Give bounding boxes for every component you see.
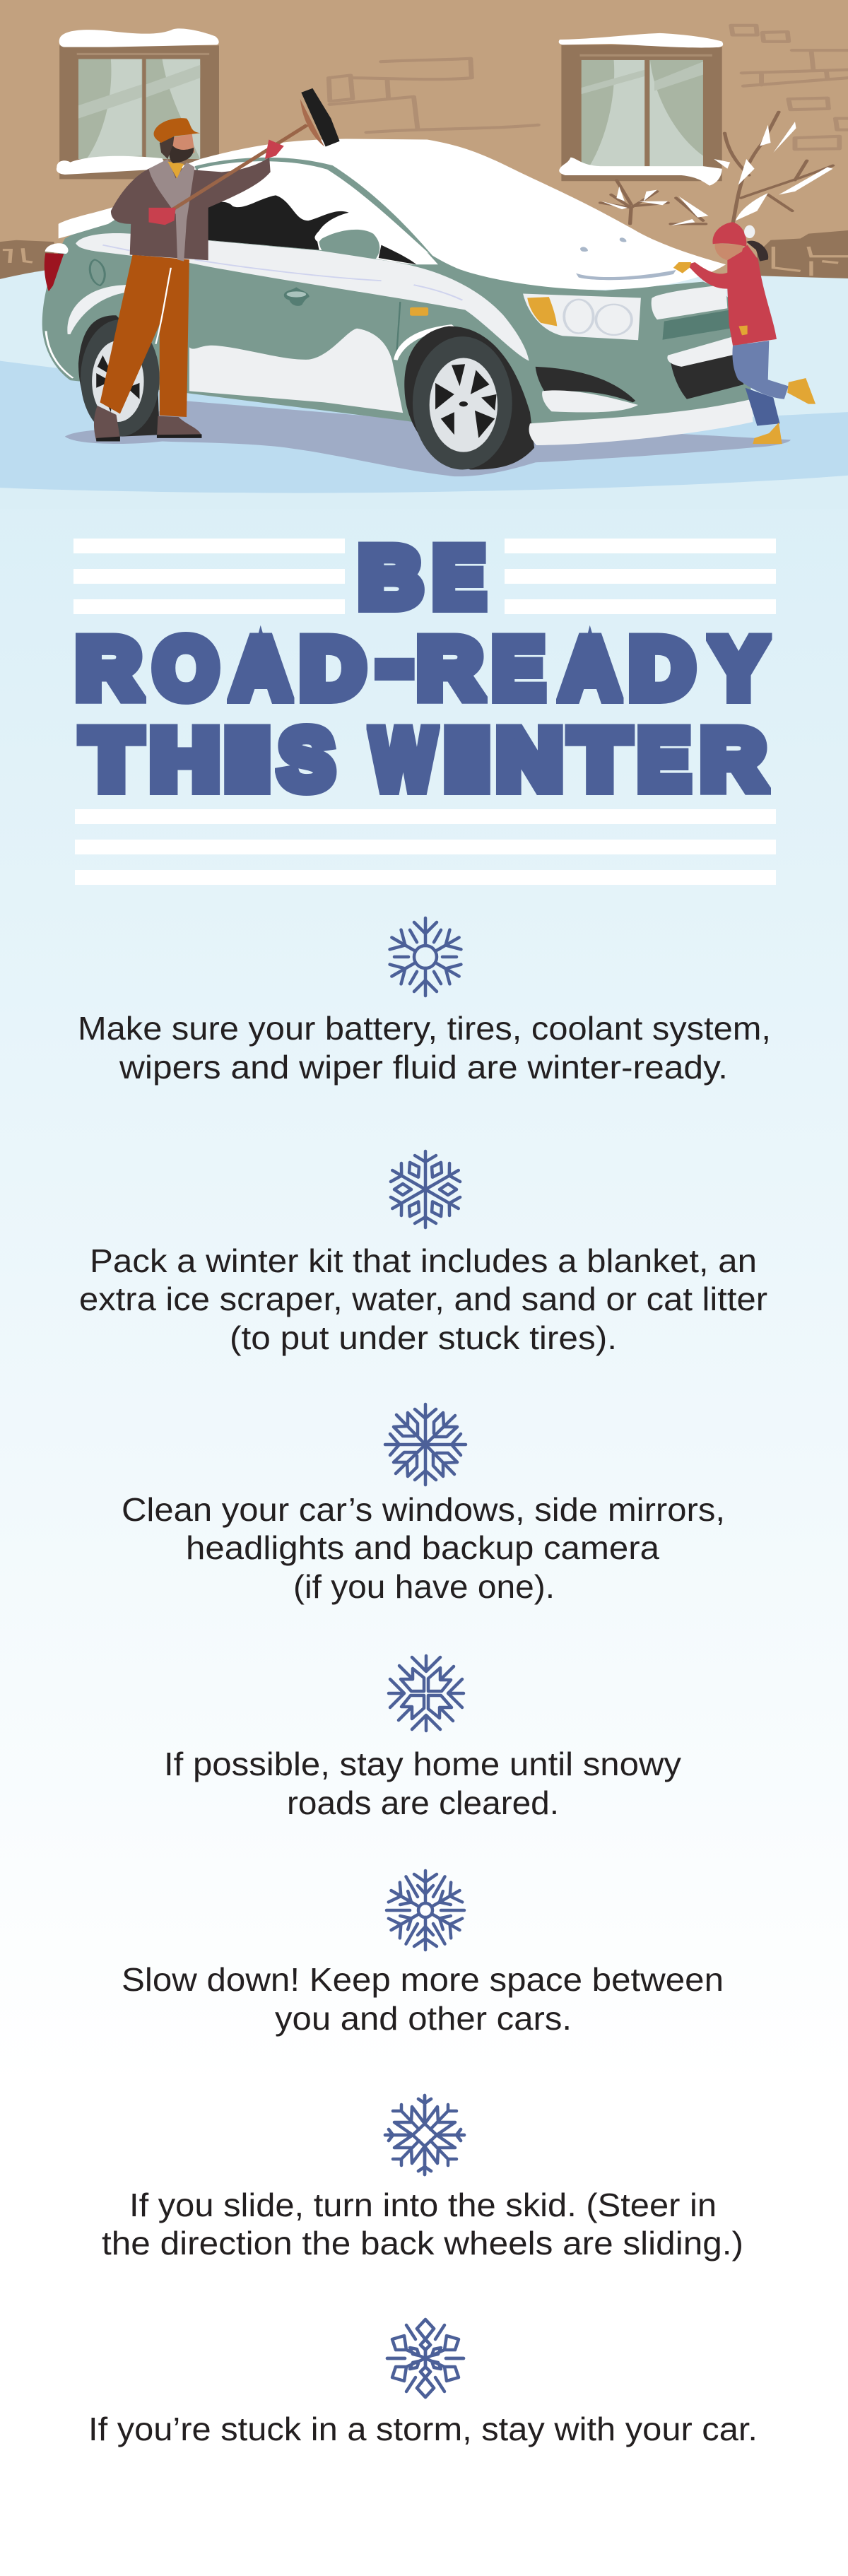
title	[76, 530, 772, 807]
taillight	[45, 253, 64, 291]
lower right grille	[671, 354, 743, 399]
title line: ROAD-READY: R	[418, 621, 482, 716]
dark side window	[207, 195, 349, 250]
left sill snow	[57, 156, 167, 175]
tip 2 text	[79, 1242, 767, 1356]
child's dark trouser leg	[746, 388, 780, 425]
tip 5 text: Slow down! Keep more space between	[122, 1961, 724, 1998]
tip 7 text: If you’re stuck in a storm, stay with your car.	[88, 2411, 758, 2447]
title line: ROAD-READY: D	[300, 621, 365, 716]
child	[673, 222, 815, 444]
mirror snow	[314, 214, 351, 242]
icon: snowflake 3	[385, 1404, 466, 1485]
child's standing boot	[753, 423, 782, 444]
grille snow lower	[667, 336, 736, 367]
car shadow	[65, 401, 791, 476]
tip 3 text	[122, 1491, 725, 1605]
man's hair	[160, 136, 174, 159]
brick wall background	[0, 0, 848, 286]
tip 7	[88, 2319, 758, 2447]
title line: THIS WINTER: N	[497, 712, 562, 807]
upper grille	[663, 310, 730, 340]
lower title stripe 2	[75, 840, 776, 854]
tip 4	[164, 1656, 681, 1821]
title line: THIS WINTER: T	[83, 712, 141, 807]
indicator light	[410, 307, 428, 316]
title line: THIS WINTER: E	[638, 712, 690, 807]
title line: BE: B	[359, 530, 422, 625]
tip 6 text: If you slide, turn into the skid. (Steer in	[129, 2187, 717, 2223]
title line: ROAD-READY: A	[232, 621, 290, 716]
icon: snowflake 5	[386, 1871, 465, 1950]
intake snow	[542, 390, 638, 412]
tip 1 text: Make sure your battery, tires, coolant system,	[78, 1010, 771, 1047]
tip 6 text: the direction the back wheels are sliding.)	[102, 2225, 743, 2262]
fog lamp intake	[536, 367, 635, 402]
title stripes: left lower	[73, 599, 345, 614]
tip 4 text: roads are cleared.	[287, 1784, 559, 1821]
icon: snowflake 4	[389, 1656, 464, 1731]
title line: ROAD-READY: R	[76, 621, 141, 716]
handle snow	[287, 291, 306, 298]
door seam	[396, 302, 400, 357]
title line: THIS WINTER: T	[571, 712, 629, 807]
title line: THIS WINTER	[76, 712, 771, 807]
title line: THIS WINTER: H	[151, 712, 219, 807]
bare trees with snow	[600, 112, 833, 225]
front bumper snow	[529, 399, 753, 445]
left window	[59, 45, 219, 179]
icon: snowflake 6	[385, 2095, 464, 2175]
title line: BE: E	[433, 530, 485, 625]
title line: ROAD-READY: D	[630, 621, 694, 716]
tip 1	[78, 918, 771, 1086]
child's face	[715, 243, 743, 260]
title line: THIS WINTER: W	[372, 712, 435, 807]
title line: THIS WINTER: I	[445, 712, 489, 807]
left window snow	[59, 28, 219, 47]
tip 5	[122, 1871, 724, 2037]
child's coat	[687, 245, 777, 346]
child's raised boot	[787, 378, 815, 404]
tip 4 text	[164, 1746, 681, 1821]
boot soles	[96, 434, 201, 441]
title line: THIS WINTER: I	[225, 712, 269, 807]
side window frame	[197, 157, 438, 264]
upper door snow band	[76, 233, 529, 361]
icon: snowflake 1	[386, 918, 465, 996]
right stone wall	[757, 230, 848, 278]
side mirror	[319, 230, 379, 259]
title line: ROAD-READY: Y	[711, 621, 766, 716]
lower title stripe 1	[75, 809, 776, 824]
title line: BE	[358, 530, 488, 625]
roof trim	[195, 158, 436, 259]
taillight snow	[45, 243, 69, 254]
hood wiper	[576, 270, 676, 280]
title line: ROAD-READY	[76, 615, 772, 716]
right window	[561, 45, 722, 181]
tip 2 text: extra ice scraper, water, and sand or cat litter	[79, 1281, 767, 1317]
title line: ROAD-READY: A	[561, 621, 619, 716]
front wheel	[404, 326, 534, 469]
broom	[170, 88, 340, 211]
man's yellow shirt	[167, 162, 184, 179]
windshield corner	[379, 245, 416, 264]
leg highlight	[155, 268, 171, 344]
lower title stripe 3	[75, 870, 776, 885]
tip 3 text: Clean your car’s windows, side mirrors,	[122, 1491, 725, 1528]
tip 3 text: (if you have one).	[293, 1568, 555, 1605]
grille snow upper	[652, 285, 727, 319]
tip 1 text: wipers and wiper fluid are winter-ready.	[119, 1049, 728, 1086]
tip 2 text: (to put under stuck tires).	[230, 1319, 617, 1356]
title line: ROAD-READY: -	[378, 615, 411, 710]
man's beard	[170, 144, 194, 163]
snow ground	[0, 269, 848, 509]
tip 4 text: If possible, stay home until snowy	[164, 1746, 681, 1782]
door reflections	[102, 245, 462, 300]
right sill snow	[559, 158, 722, 186]
right window snow	[559, 33, 723, 47]
tip 5 text: you and other cars.	[275, 2000, 572, 2037]
man's boots	[94, 406, 201, 441]
child's hat	[712, 222, 746, 247]
title stripes: right lower	[505, 599, 776, 614]
man's cap	[154, 118, 200, 143]
washer nozzles	[580, 237, 626, 252]
rear arch snow	[67, 285, 129, 334]
man's gloves	[148, 139, 284, 225]
front arch snow	[394, 324, 457, 360]
tip 3	[122, 1404, 725, 1605]
man's vest	[148, 159, 195, 261]
car body	[42, 158, 751, 445]
title line: ROAD-READY: E	[493, 621, 544, 716]
roof snow	[59, 139, 726, 290]
title line: THIS WINTER: S	[279, 712, 334, 807]
title line: THIS WINTER: R	[701, 712, 765, 807]
title stripes: left middle	[73, 569, 345, 584]
rear edge highlight	[46, 331, 73, 378]
brick outlines	[329, 25, 848, 149]
tip 2 text: Pack a winter kit that includes a blanket, an	[90, 1242, 757, 1279]
left stone wall	[0, 240, 54, 280]
tip 3 text: headlights and backup camera	[186, 1529, 659, 1566]
lower door snow	[189, 329, 403, 413]
hat pompom	[744, 225, 755, 238]
man's jacket	[111, 158, 271, 260]
child's hair	[746, 241, 768, 261]
tip 6 text	[102, 2187, 743, 2262]
fuel cap marks	[90, 259, 105, 286]
man's legs	[100, 254, 189, 417]
illustration: man and child clearing snow from car	[0, 0, 848, 493]
door handle	[284, 287, 310, 306]
title stripes: left	[73, 539, 345, 553]
tip 5 text	[122, 1961, 724, 2037]
headlight	[523, 294, 641, 340]
icon: snowflake 2	[387, 1151, 464, 1228]
rear wheel	[78, 315, 160, 437]
tip 6	[102, 2095, 743, 2262]
man's head	[162, 134, 195, 159]
tip 1 text	[78, 1010, 771, 1086]
title line: ROAD-READY: O	[154, 621, 218, 716]
icon: snowflake 7	[387, 2319, 464, 2397]
child's gloves	[673, 262, 748, 335]
child's light trouser leg	[732, 341, 789, 399]
stone joints	[3, 247, 848, 276]
icy road	[0, 361, 848, 493]
title stripes: right	[505, 539, 776, 553]
tip 2	[79, 1151, 767, 1356]
title stripes: right middle	[505, 569, 776, 584]
